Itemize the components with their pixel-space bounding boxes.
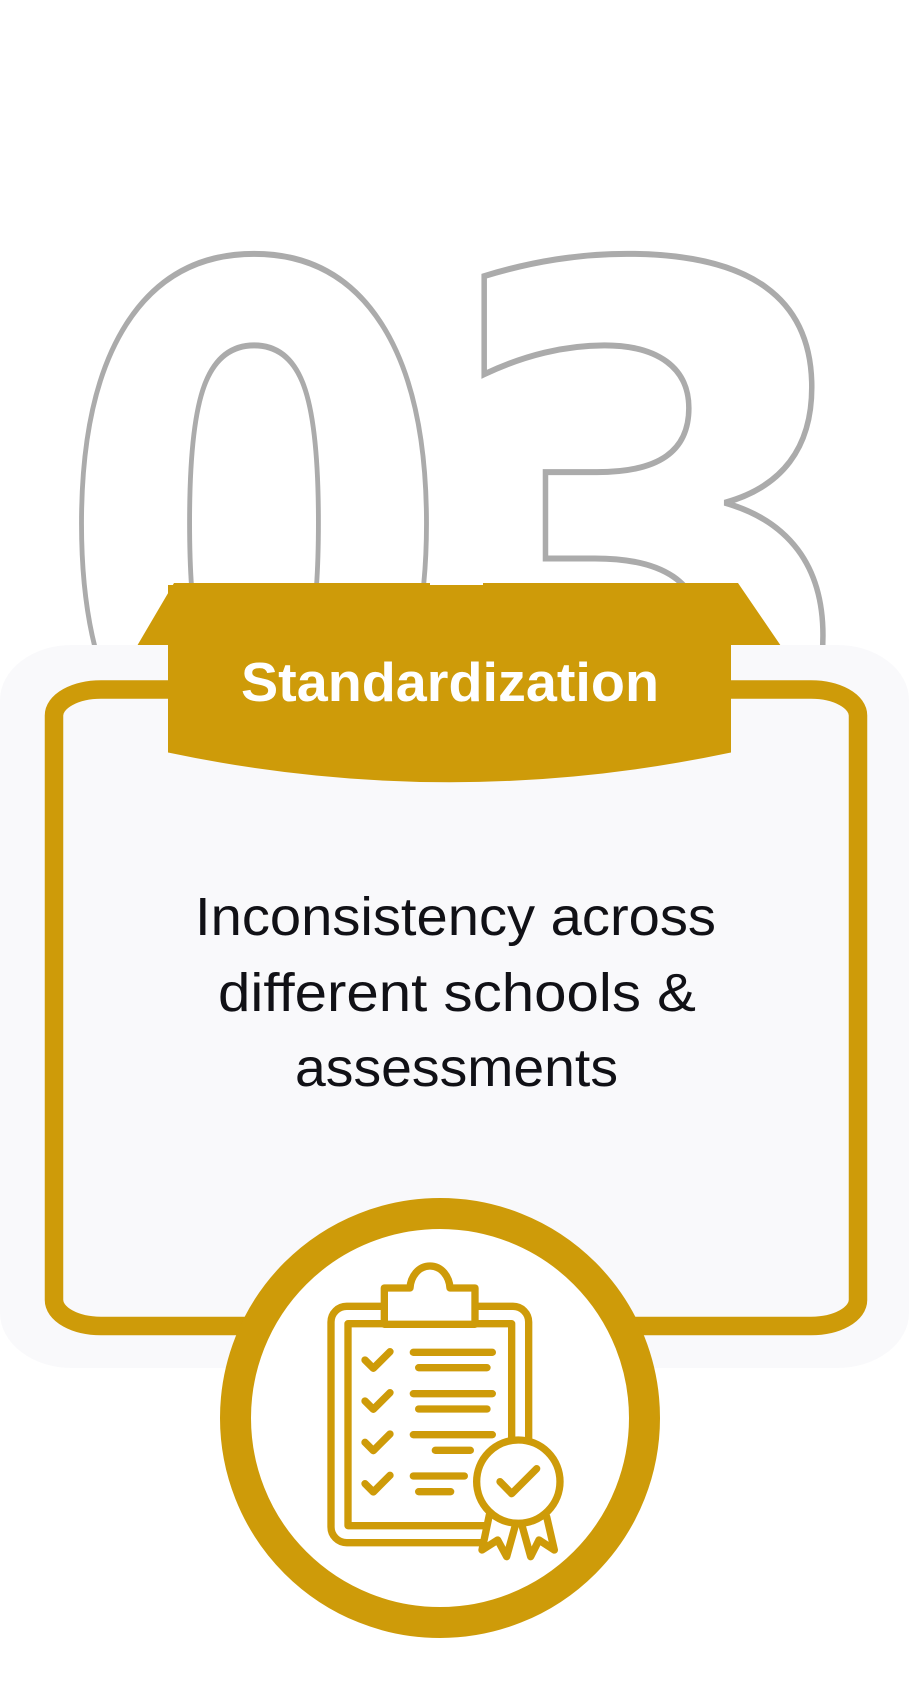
award ribbons <box>482 1515 554 1557</box>
icon: clipboard checklist with award badge <box>331 1266 560 1557</box>
clipboard paper <box>348 1324 512 1526</box>
award badge <box>477 1440 560 1523</box>
text block: description: assessments <box>295 1038 618 1098</box>
checkmarks <box>365 1352 390 1492</box>
large outlined number 03: 3 <box>420 122 875 952</box>
text block: description <box>195 887 716 1098</box>
heading: Standardization: Standardization <box>241 651 659 713</box>
icon ring: gold circle <box>236 1214 644 1622</box>
panel: gold inner border <box>54 690 858 1326</box>
banner back flaps <box>137 583 781 646</box>
text block: description: Inconsistency across <box>195 887 716 947</box>
panel: light background card <box>0 645 909 1368</box>
banner: gold title ribbon <box>168 585 731 782</box>
list lines <box>413 1352 492 1492</box>
clipboard clip <box>384 1266 475 1324</box>
large outlined number 03 <box>54 122 875 952</box>
large outlined number 03: 0 <box>54 122 454 952</box>
text block: description: different schools & <box>218 963 696 1023</box>
clipboard board <box>331 1306 529 1543</box>
badge check <box>500 1469 537 1494</box>
